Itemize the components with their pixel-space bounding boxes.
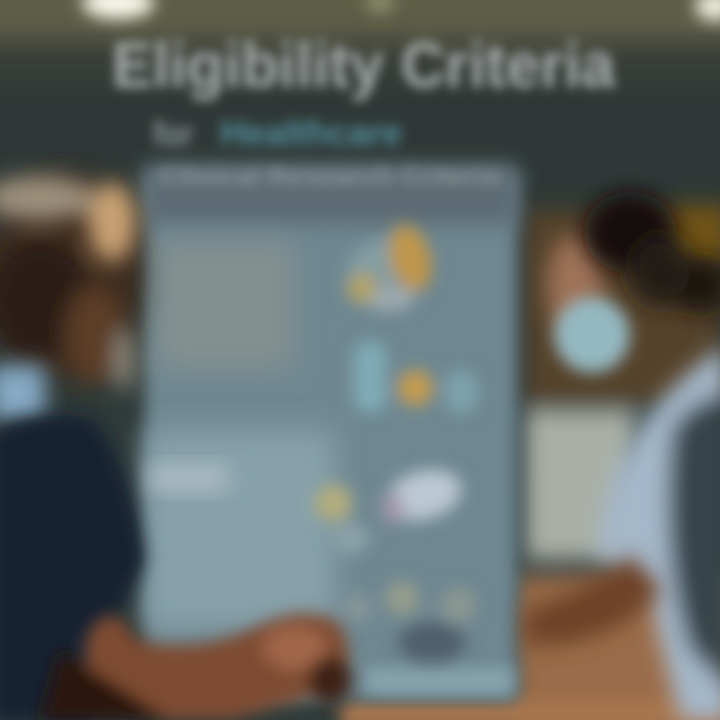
- board surface: [145, 170, 517, 700]
- information board: [145, 165, 517, 700]
- ceiling lights: [82, 0, 720, 21]
- board text block: [155, 240, 295, 370]
- left person hair and head: [0, 175, 140, 375]
- icon: bottle and dots: [354, 342, 478, 414]
- icon: lower row: [314, 462, 467, 554]
- person: left: [0, 175, 352, 720]
- right person mask: [554, 297, 630, 373]
- right person arm: [525, 555, 662, 645]
- title: Eligibility Criteria: [112, 29, 615, 101]
- left person shirt: [0, 415, 145, 720]
- table: [340, 700, 720, 720]
- left person collar: [0, 365, 45, 420]
- icon: pie chart: [346, 220, 438, 311]
- right person shirt: [598, 345, 720, 720]
- left person arm and hand: [40, 614, 352, 720]
- board heading chip: [150, 465, 228, 491]
- subtitle word: for: [153, 113, 193, 154]
- icon: bottom group: [344, 581, 476, 662]
- right background: wood and pale wall: [515, 205, 720, 720]
- right person hair: [584, 192, 720, 313]
- right person face: [547, 235, 603, 335]
- person: right: [525, 192, 720, 720]
- subheading line: Clinical Research Criteria: [160, 164, 501, 191]
- subtitle highlight: Healthcare: [220, 112, 402, 153]
